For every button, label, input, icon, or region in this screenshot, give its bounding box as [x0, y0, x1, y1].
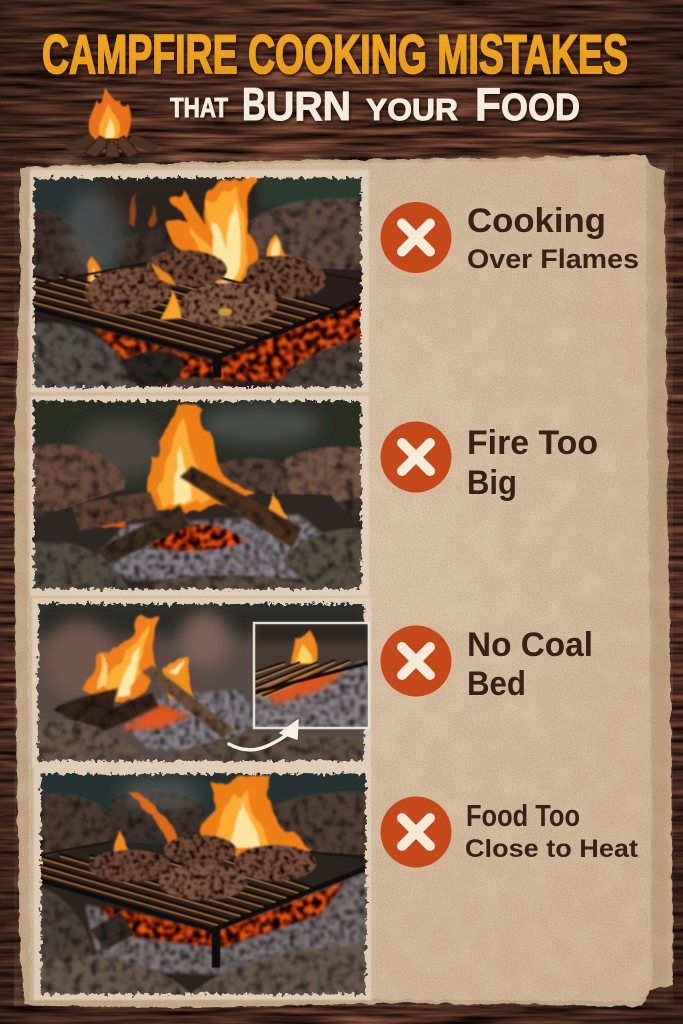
grill	[40, 842, 367, 968]
ground under grill	[25, 262, 365, 395]
mistake 2: fire too big	[380, 422, 598, 502]
label: Cooking	[467, 202, 606, 240]
ground under grill	[32, 842, 374, 1002]
front rocks	[25, 529, 370, 597]
panel: fire too big photo	[25, 392, 370, 597]
panel: no coal bed photo	[30, 596, 372, 771]
subtitle: that burn your food: YOUR	[366, 92, 458, 127]
flames behind patties	[84, 177, 300, 303]
patties	[89, 835, 316, 900]
label	[465, 798, 639, 863]
panel: cooking over flames photo	[25, 170, 370, 395]
label: Over Flames	[467, 244, 639, 274]
flames	[114, 775, 312, 860]
label	[467, 424, 598, 502]
flames	[84, 612, 196, 702]
mistake 4: food too close to heat	[380, 796, 639, 868]
rocks	[38, 790, 368, 858]
rocks	[36, 720, 365, 764]
label: Close to Heat	[465, 835, 639, 863]
subtitle: that burn your food: B	[242, 78, 266, 130]
patties	[83, 248, 328, 329]
icon: campfire	[64, 87, 160, 157]
icon: x mark	[380, 796, 452, 868]
label	[467, 626, 593, 703]
label: Big	[467, 464, 517, 502]
ash	[85, 870, 370, 975]
embers	[100, 882, 345, 948]
inset frame	[254, 623, 369, 728]
inset close-up	[255, 624, 368, 727]
mistake 3: no coal bed	[380, 626, 593, 703]
ash bed	[125, 690, 260, 750]
ground	[32, 490, 356, 542]
label: Bed	[467, 665, 526, 703]
title	[42, 23, 628, 130]
logs	[72, 466, 302, 565]
embers	[95, 300, 365, 382]
flames	[100, 405, 288, 526]
main photo	[30, 596, 372, 771]
subtitle: that burn your food	[170, 78, 580, 130]
subtitle: that burn your food: OOD	[501, 87, 580, 129]
label	[467, 202, 639, 274]
arrow	[229, 720, 298, 750]
label: Fire Too	[467, 424, 598, 462]
subtitle: that burn your food: THAT	[170, 92, 228, 123]
rocks	[32, 443, 363, 528]
ash bed	[95, 515, 330, 580]
paper sheet	[27, 160, 652, 1001]
icon: x mark	[380, 202, 452, 273]
icon: x mark	[380, 422, 452, 492]
flames around patties	[150, 262, 232, 320]
panel: food too close to heat photo	[25, 766, 374, 1004]
icon: x mark	[380, 626, 452, 696]
subtitle: that burn your food: URN	[266, 83, 351, 129]
rocks	[32, 197, 363, 284]
grill	[33, 263, 360, 378]
foreground rocks	[25, 323, 370, 395]
subtitle: that burn your food: F	[475, 78, 501, 130]
logs	[52, 665, 235, 738]
label: Food Too	[466, 798, 580, 833]
front rocks	[38, 886, 368, 998]
mistake 1: cooking over flames	[380, 202, 639, 274]
smoke	[65, 190, 125, 274]
label: No Coal	[467, 626, 593, 664]
